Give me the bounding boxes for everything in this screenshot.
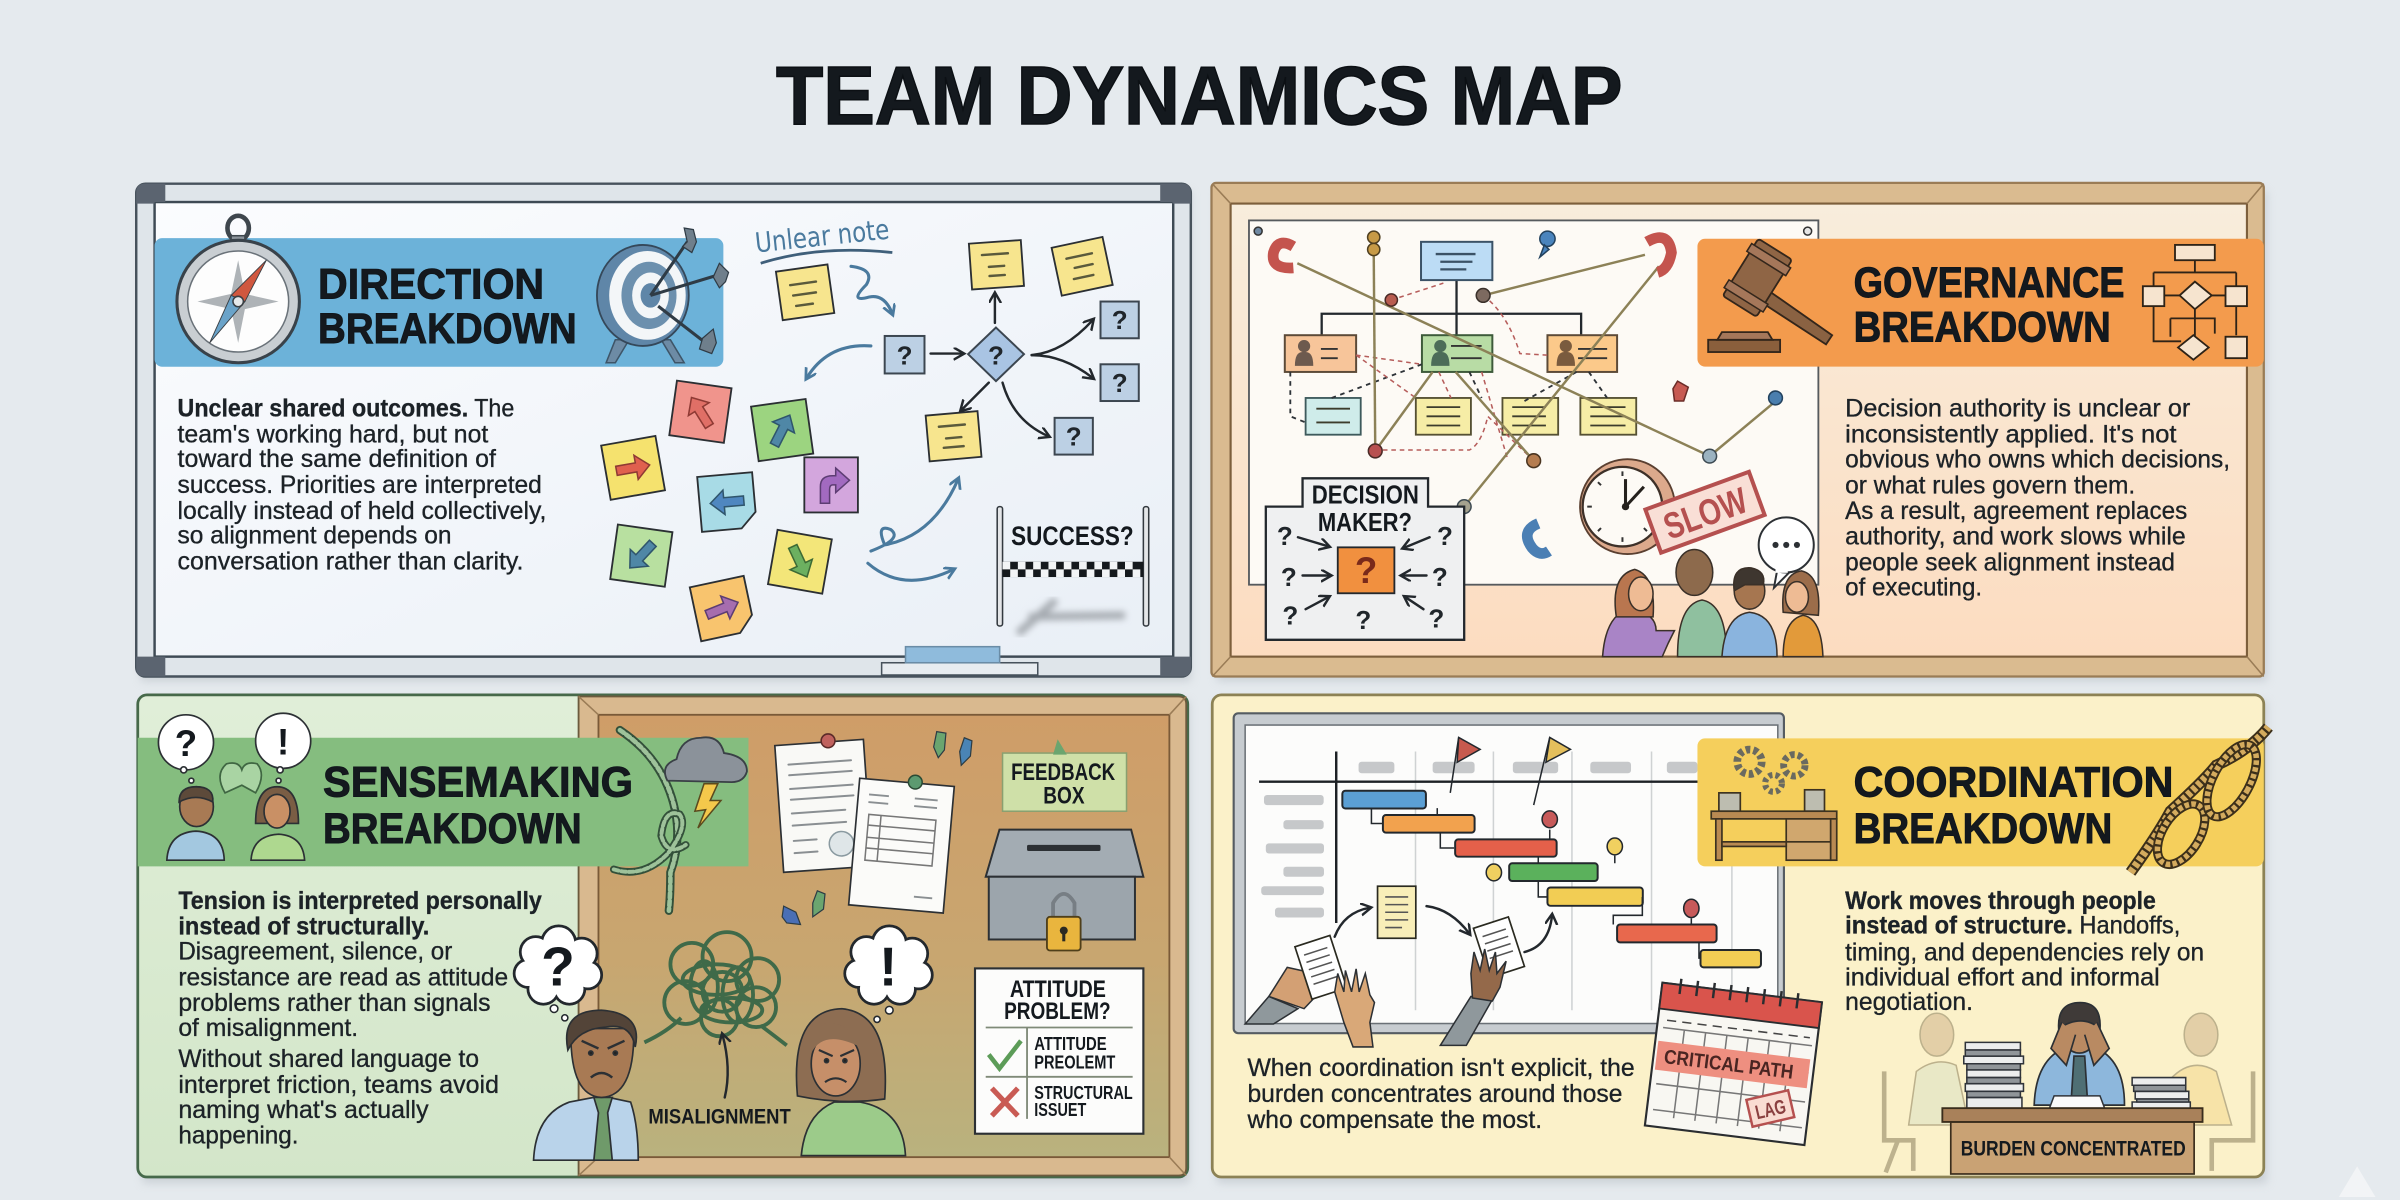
whiteboard frame: [136, 184, 1191, 681]
gantt grid: [1259, 752, 1732, 1010]
icon: desk with gears: [1711, 750, 1837, 860]
body text: coordination bottom: who compensate the most.: [1246, 1106, 1542, 1134]
body text: coordination top: negotiation.: [1845, 988, 1973, 1016]
body text: direction: locally instead of held collectively,: [178, 497, 546, 525]
body text: direction: Unclear shared outcomes. The: [178, 394, 514, 422]
icon: compass: [177, 216, 299, 363]
body text: direction: team's working hard, but not: [178, 420, 488, 448]
calendar: critical path: LAG: [1753, 1096, 1788, 1124]
strings and pins: [1254, 227, 1812, 514]
thought bubble: exclamation: [845, 926, 932, 1022]
body text: governance: [1845, 394, 2230, 601]
card: attitude problem: ISSUET: [1034, 1099, 1087, 1120]
card: attitude problem: PROBLEM?: [1004, 998, 1111, 1025]
question boxes and diamond flow: ?: [988, 340, 1004, 370]
header band: governance: [1697, 239, 2264, 367]
icon: gavel: [1708, 237, 1832, 352]
heading: direction breakdown: DIRECTION: [318, 260, 544, 308]
panel frame: [1212, 695, 2267, 1183]
heading: governance breakdown: [1854, 259, 2124, 351]
handoff documents and arrows: [1335, 886, 1552, 952]
callout: decision maker: ?: [1437, 521, 1453, 551]
body text: sensemaking: problems rather than signals: [178, 989, 491, 1017]
body text: sensemaking: Tension is interpreted personally: [178, 887, 542, 915]
body text: coordination bottom: When coordination isn't explicit, the: [1247, 1054, 1635, 1082]
watermark triangle: [2339, 1166, 2376, 1197]
milestones and flags: [1450, 737, 1699, 924]
body text: coordination top: instead of structure. Handoffs,: [1845, 912, 2180, 940]
body text: governance: obvious who owns which decisions,: [1845, 446, 2230, 474]
desk: burden concentrated: [1942, 1108, 2203, 1174]
body text: governance: inconsistently applied. It's not: [1845, 420, 2177, 448]
question boxes and diamond flow: ?: [1112, 368, 1128, 398]
callout: decision maker: ?: [1355, 605, 1371, 635]
icon: locked feedback box: [986, 830, 1143, 951]
calendar: critical path: [1645, 977, 1823, 1145]
panel: governance breakdown: [1211, 183, 2267, 681]
body text: governance: of executing.: [1845, 573, 1982, 601]
heading: governance breakdown: BREAKDOWN: [1854, 303, 2111, 351]
title: TEAM DYNAMICS MAP: [776, 49, 1622, 142]
icon: clock: [1580, 459, 1675, 554]
icon: two people with thought bubbles: [158, 713, 311, 860]
body text: coordination top: Work moves through people: [1845, 887, 2156, 915]
whiteboard with gantt: [1234, 713, 1784, 1047]
card: attitude problem: ATTITUDE: [1010, 976, 1106, 1003]
org chart: [1285, 242, 1636, 461]
body text: sensemaking: Disagreement, silence, or: [178, 938, 453, 966]
panel: sensemaking breakdown: [138, 695, 1189, 1183]
body text: governance: or what rules govern them.: [1845, 472, 2135, 500]
panel frame: [138, 695, 1189, 1183]
thought bubble: exclamation: !: [879, 936, 897, 998]
gantt bars: [1342, 791, 1761, 967]
card: attitude problem: PREOLEMT: [1034, 1051, 1116, 1072]
label: misalignment: MISALIGNMENT: [648, 1104, 791, 1128]
callout: decision maker: ?: [1355, 550, 1377, 591]
heading: coordination breakdown: [1854, 759, 2173, 853]
pinned documents: [775, 734, 954, 913]
callout: decision maker: ?: [1432, 562, 1448, 592]
hands passing papers: [1245, 917, 1524, 1047]
question boxes and diamond flow: ?: [1112, 305, 1128, 335]
heading: direction breakdown: [318, 260, 577, 353]
body text: sensemaking: instead of structurally.: [178, 912, 429, 940]
body text: coordination top: [1845, 887, 2204, 1016]
body text: governance: Decision authority is unclear or: [1845, 394, 2191, 422]
panel: direction breakdown: [136, 184, 1191, 681]
speech bubble: [1759, 517, 1814, 588]
finish line banner: [997, 507, 1149, 634]
body text: direction: conversation rather than clarity.: [178, 547, 523, 575]
body text: governance: As a result, agreement replaces: [1845, 497, 2187, 525]
push pins: [782, 732, 972, 924]
callout: decision maker: ?: [1281, 562, 1297, 592]
icon: tangled rope misalignment: [644, 932, 787, 1045]
heading: sensemaking breakdown: [323, 759, 633, 853]
body text: sensemaking: [178, 887, 542, 1149]
callout: decision maker: MAKER?: [1318, 507, 1412, 537]
card: attitude problem: STRUCTURAL: [1034, 1082, 1133, 1103]
header band: coordination: [1697, 738, 2264, 866]
icon: two people with thought bubbles: !: [277, 722, 289, 763]
plain sticky notes: [776, 237, 1113, 461]
question boxes and diamond flow: [885, 294, 1139, 455]
body text: coordination bottom: [1246, 1054, 1635, 1134]
callout: decision maker: DECISION: [1312, 480, 1419, 510]
icon: knotted rope: [614, 730, 686, 911]
body text: coordination top: timing, and dependencies rely on: [1845, 938, 2204, 966]
arrow to tangle: [722, 1035, 728, 1097]
question boxes and diamond flow: ?: [1066, 421, 1082, 451]
thought bubble: question: ?: [541, 936, 575, 998]
body text: coordination top: individual effort and informal: [1845, 963, 2160, 991]
thought bubble: question: [514, 926, 602, 1021]
body text: sensemaking: resistance are read as attitude: [178, 963, 508, 991]
finish line banner: SUCCESS?: [1011, 521, 1134, 551]
body text: direction: toward the same definition of: [178, 445, 497, 473]
heading: sensemaking breakdown: SENSEMAKING: [323, 759, 633, 807]
heading: coordination breakdown: BREAKDOWN: [1854, 805, 2112, 853]
icon: flowchart: [2143, 245, 2247, 360]
calendar: critical path: CRITICAL PATH: [1663, 1046, 1795, 1084]
callout: decision maker: ?: [1282, 600, 1298, 630]
heading: sensemaking breakdown: BREAKDOWN: [323, 805, 582, 853]
stamp: slow: SLOW: [1658, 479, 1753, 547]
header band: direction: [155, 238, 723, 367]
pinned paper: [1249, 220, 1818, 585]
man frowning: [534, 1010, 638, 1160]
paper stacks: [1964, 1042, 2190, 1110]
body text: coordination bottom: burden concentrates around those: [1247, 1080, 1622, 1108]
body text: governance: authority, and work slows while: [1845, 522, 2186, 550]
header band: sensemaking: [138, 738, 748, 866]
people discussing: [1603, 549, 1823, 657]
body text: sensemaking: Without shared language to: [178, 1045, 479, 1073]
icon: two people with thought bubbles: ?: [175, 723, 197, 764]
callout: decision maker: [1266, 478, 1464, 640]
sign: feedback box: [1003, 739, 1127, 811]
body text: sensemaking: naming what's actually: [178, 1096, 429, 1124]
wood frame: [1211, 183, 2267, 681]
body text: governance: people seek alignment instead: [1845, 548, 2175, 576]
overwhelmed person: [2034, 1003, 2124, 1105]
card: attitude problem: ATTITUDE: [1034, 1033, 1107, 1054]
question boxes and diamond flow: ?: [897, 340, 913, 370]
sign: feedback box: BOX: [1043, 783, 1085, 810]
faded coworkers: [1884, 1013, 2253, 1172]
heading: governance breakdown: GOVERNANCE: [1854, 259, 2124, 307]
icon: target with arrows: [597, 228, 729, 363]
panel: coordination breakdown: [1212, 695, 2268, 1183]
body text: sensemaking: interpret friction, teams avoid: [178, 1071, 499, 1099]
icon: storm cloud: [665, 737, 747, 828]
icon: magnets: [1273, 238, 1671, 553]
desk: burden concentrated: BURDEN CONCENTRATED: [1961, 1137, 2186, 1161]
card: attitude problem: [975, 968, 1143, 1134]
curved arrows: [807, 266, 958, 580]
callout: decision maker: ?: [1277, 521, 1293, 551]
heading: direction breakdown: BREAKDOWN: [318, 305, 577, 353]
heading: coordination breakdown: COORDINATION: [1854, 759, 2173, 807]
body text: direction: so alignment depends on: [178, 521, 452, 549]
callout: decision maker: ?: [1428, 604, 1444, 634]
icon: rope chain: [2131, 727, 2268, 872]
woman frowning: [796, 1009, 906, 1156]
body text: direction: success. Priorities are interpreted: [178, 471, 542, 499]
handwritten note: Unlear note: [754, 214, 891, 260]
body text: sensemaking: of misalignment.: [178, 1014, 358, 1042]
sign: feedback box: FEEDBACK: [1011, 759, 1115, 786]
body text: direction: [178, 394, 546, 575]
arrow stickies: [601, 381, 858, 641]
body text: sensemaking: happening.: [178, 1121, 298, 1149]
